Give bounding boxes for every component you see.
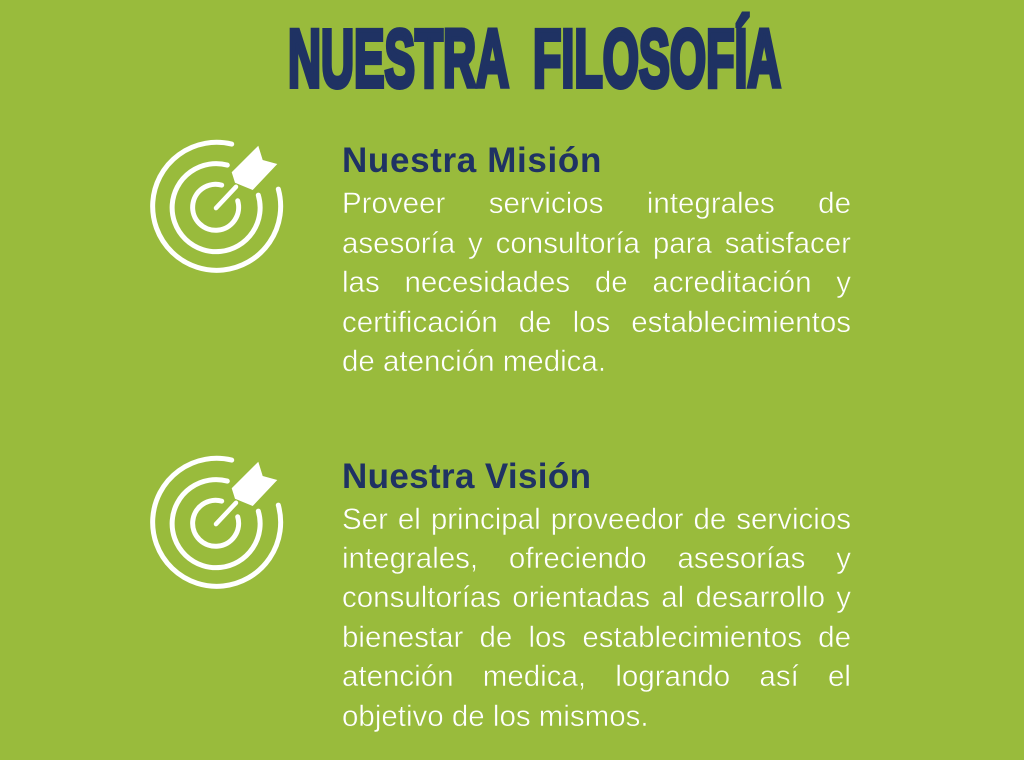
text block: vision: objetivo de los mismos.: [342, 700, 649, 733]
title: NUESTRA: [288, 14, 509, 104]
text block: vision: consultorías orientadas al desarrollo y: [342, 581, 851, 614]
text block: vision: [342, 503, 851, 733]
text block: mission: [342, 187, 851, 378]
heading: vision: Nuestra Visión: [342, 457, 591, 496]
text block: mission: de atención medica.: [342, 345, 606, 378]
icon: vision target with arrow: [150, 456, 284, 589]
text block: mission: certificación de los establecimientos: [342, 306, 851, 339]
heading: mission: Nuestra Misión: [342, 141, 602, 180]
title: FILOSOFÍA: [533, 14, 781, 104]
text block: vision: bienestar de los establecimientos de: [342, 621, 851, 654]
text block: vision: atención medica, logrando así el: [342, 660, 851, 693]
text block: mission: las necesidades de acreditación y: [342, 266, 851, 299]
text block: vision: Ser el principal proveedor de servicios: [342, 503, 851, 536]
text block: vision: integrales, ofreciendo asesorías y: [342, 542, 851, 575]
text block: mission: Proveer servicios integrales de: [342, 187, 851, 220]
icon: mission target with arrow: [150, 140, 284, 273]
text block: mission: asesoría y consultoría para satisfacer: [342, 227, 851, 260]
